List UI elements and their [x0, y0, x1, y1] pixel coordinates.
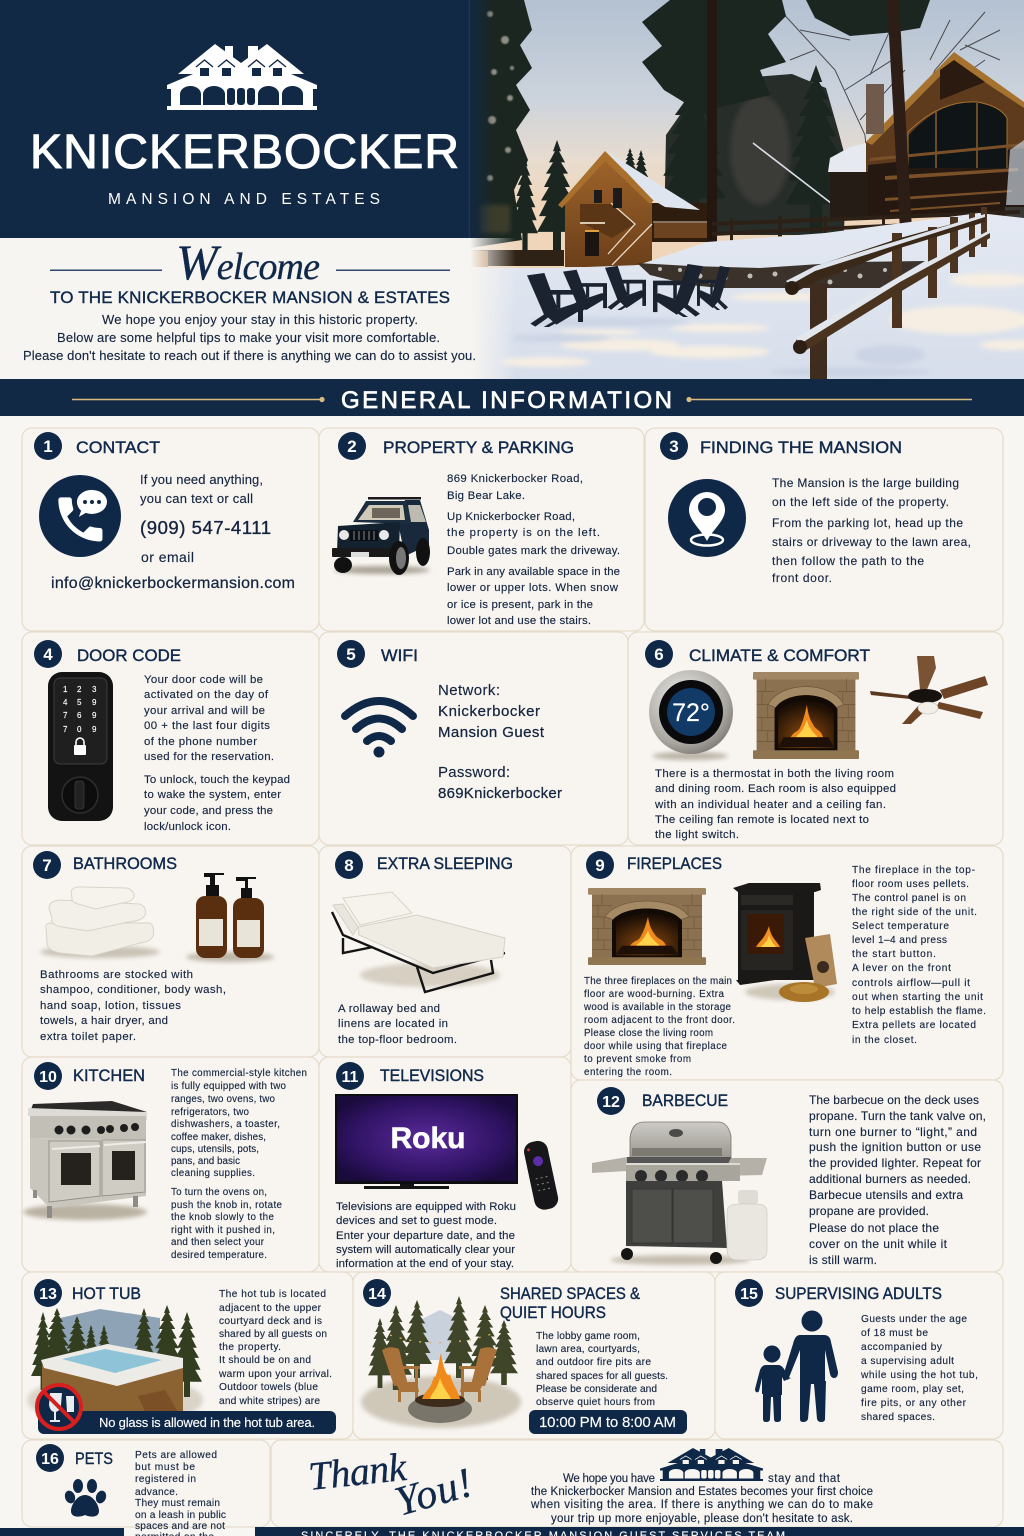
icon: remote: [522, 1139, 560, 1212]
fireplaces right text: to help establish the flame.: [852, 1006, 986, 1017]
icon: towels: [40, 887, 160, 958]
wifi details: [438, 682, 562, 802]
icon: rollaway bed: [332, 892, 505, 992]
finding text: then follow the path to the: [772, 554, 924, 568]
logo: mansion: [167, 44, 317, 110]
supervising text: Guests under the age: [861, 1314, 967, 1325]
icon: paw: [63, 1479, 108, 1517]
fireplaces right text: the right side of the unit.: [852, 907, 977, 918]
fireplaces left text: floor are wood-burning. Extra: [584, 989, 725, 1000]
wifi details: Network:: [438, 682, 500, 699]
shared spaces text: shared spaces for all guests.: [536, 1371, 668, 1382]
door code text: your code, and press the: [144, 805, 273, 817]
wifi details: Knickerbocker: [438, 703, 540, 720]
property text: the property is on the left.: [447, 527, 600, 539]
welcome text: [23, 312, 476, 363]
shared spaces text: Please be considerate and: [536, 1384, 657, 1395]
right foreground trunk: [887, 0, 912, 230]
icon: smart lock: 4: [63, 698, 68, 707]
adirondack chairs: [527, 264, 730, 327]
bathrooms text: towels, a hair dryer, and: [40, 1015, 168, 1027]
badge 3: [660, 432, 688, 460]
icon: smart lock: 7: [63, 725, 68, 734]
welcome text: Please don't hesitate to reach out if there is anything we can do to assist you.: [23, 348, 476, 363]
door code text: to wake the system, enter: [144, 789, 281, 801]
badge 12: [597, 1087, 625, 1115]
right cabin: [828, 52, 1024, 224]
bathrooms text: [40, 969, 226, 1043]
pets text: advance.: [135, 1487, 178, 1498]
fireplaces left text: The three fireplaces on the main: [584, 976, 732, 987]
icon: roku tv: Roku: [390, 1122, 466, 1155]
door code text: activated on the day of: [144, 689, 269, 701]
illustration: fire pit and chairs: [361, 1296, 521, 1428]
property text: 869 Knickerbocker Road,: [447, 473, 583, 485]
kitchen text: cups, utensils, pots,: [171, 1144, 259, 1155]
section heading: GENERAL INFORMATION: [341, 387, 672, 414]
badge 13: [34, 1279, 62, 1307]
fireplaces left text: [583, 976, 735, 1078]
panel 13: hot tub: [22, 1272, 353, 1439]
televisions text: Enter your departure date, and the: [336, 1230, 515, 1242]
supervising text: shared spaces.: [861, 1412, 935, 1423]
supervising text: game room, play set,: [861, 1384, 964, 1395]
badge 6: 6: [654, 645, 664, 664]
door code text: [144, 674, 290, 833]
contact text: info@knickerbockermansion.com: [51, 575, 295, 592]
hot tub text: adjacent to the upper: [219, 1303, 322, 1314]
wifi details: Password:: [438, 764, 510, 781]
icon: adult and child: [755, 1310, 838, 1422]
badge 9: [586, 851, 614, 879]
icon: map pin: [668, 479, 746, 557]
subtitle: MANSION AND ESTATES: [108, 191, 380, 208]
bed text: [338, 1003, 457, 1046]
icon: wifi: [345, 701, 413, 755]
welcome rule right: [336, 270, 450, 271]
icon: smart lock: 9: [92, 711, 97, 720]
door code text: Your door code will be: [144, 674, 263, 686]
hot tub text: courtyard deck and is: [219, 1316, 322, 1327]
badge 9: 9: [595, 856, 605, 875]
heading: shared spaces and quiet hours: [500, 1285, 640, 1322]
finding text: front door.: [772, 571, 832, 585]
icon: thermostat: [649, 670, 733, 760]
badge 12: 12: [602, 1094, 620, 1111]
icon: jeep: [332, 497, 430, 575]
supervising text: [860, 1314, 978, 1423]
bathrooms text: Bathrooms are stocked with: [40, 969, 193, 981]
property text: Double gates mark the driveway.: [447, 545, 620, 557]
title: KNICKERBOCKER: [30, 126, 459, 179]
fireplaces left text: to prevent smoke from: [584, 1054, 691, 1065]
fireplaces right text: Extra pellets are located: [852, 1020, 976, 1031]
script: thank you: [306, 1444, 478, 1526]
bathrooms text: hand soap, lotion, tissues: [40, 1000, 181, 1012]
footer bar left: [0, 1528, 124, 1536]
hero photo: snowy cabins: [470, 0, 1024, 379]
badge 6: [645, 640, 673, 668]
kitchen text: cleaning supplies.: [171, 1168, 255, 1179]
supervising text: while using the hot tub,: [860, 1370, 978, 1381]
panel: thank you: [271, 1440, 1003, 1527]
door code text: used for the reservation.: [144, 751, 274, 763]
panel 5: wifi: [319, 632, 628, 845]
hot tub text: Outdoor towels (blue: [219, 1382, 318, 1393]
section bar: general information: [0, 379, 1024, 416]
badge 13: 13: [39, 1286, 57, 1303]
kitchen text: dishwashers, a toaster,: [171, 1119, 280, 1130]
shared spaces text: lawn area, courtyards,: [536, 1344, 640, 1355]
heading: kitchen: KITCHEN: [73, 1067, 145, 1085]
fireplaces right text: level 1–4 and press: [852, 935, 947, 946]
bed text: the top-floor bedroom.: [338, 1034, 457, 1046]
fireplaces right text: out when starting the unit: [852, 992, 983, 1003]
property text: Big Bear Lake.: [447, 490, 525, 502]
thank you text: the Knickerbocker Mansion and Estates becomes your first choice: [531, 1486, 873, 1498]
fireplaces right text: A lever on the front: [852, 963, 951, 974]
panel 9: fireplaces: [571, 846, 1003, 1080]
fireplaces left text: wood is available in the storage: [583, 1002, 732, 1013]
welcome text: Below are some helpful tips to make your visit more comfortable.: [57, 330, 440, 345]
barbecue text: additional burners as needed.: [809, 1172, 971, 1186]
pets text: spaces and are not: [135, 1521, 225, 1532]
pets text: but must be: [135, 1462, 195, 1473]
panel 15: supervising adults: [715, 1272, 1003, 1439]
door code text: of the phone number: [144, 736, 257, 748]
icon: small mansion: [660, 1448, 763, 1481]
property text: [447, 473, 620, 627]
badge 5: [337, 640, 365, 668]
icon: ceiling fan: [870, 656, 988, 724]
panel 3: finding the mansion: [645, 428, 1003, 631]
badge 14: [363, 1279, 391, 1307]
ground snow: [470, 213, 1024, 379]
door code text: lock/unlock icon.: [144, 821, 231, 833]
badge 8: [335, 851, 363, 879]
icon: fireplace: [753, 672, 859, 759]
hot tub text: It should be on and: [219, 1355, 311, 1366]
icon: wood fireplace: [588, 888, 706, 965]
icon: smart lock: 2: [77, 685, 82, 694]
door code text: To unlock, touch the keypad: [144, 774, 290, 786]
panel 7: bathrooms: [22, 846, 319, 1057]
retaining wall: [637, 261, 925, 288]
fireplaces left text: room adjacent to the front door.: [584, 1015, 735, 1026]
barbecue text: propane. Turn the tank valve on,: [809, 1109, 986, 1123]
heading: extra sleeping: EXTRA SLEEPING: [377, 855, 513, 873]
barbecue text: The barbecue on the deck uses: [809, 1093, 979, 1107]
badge 16: [36, 1444, 64, 1472]
contact text: If you need anything,: [140, 472, 263, 487]
barbecue text: the provided lighter. Repeat for: [809, 1156, 981, 1170]
back fence: [712, 210, 1020, 246]
heading: bathrooms: BATHROOMS: [73, 855, 177, 873]
fireplaces right text: controls airflow—pull it: [852, 978, 970, 989]
wifi details: Mansion Guest: [438, 724, 545, 741]
heading: barbecue: BARBECUE: [642, 1092, 728, 1110]
televisions text: information at the end of your stay.: [336, 1258, 514, 1270]
heading: finding the mansion: FINDING THE MANSION: [700, 439, 902, 457]
callout: no glass: [38, 1411, 336, 1434]
welcome panel: [0, 234, 516, 379]
barbecue text: [809, 1093, 986, 1267]
left cabin: [470, 151, 707, 267]
kitchen text: ranges, two ovens, two: [171, 1094, 276, 1105]
central trunk: [707, 0, 717, 245]
script: thank you: You!: [390, 1460, 478, 1526]
supervising text: a supervising adult: [861, 1356, 954, 1367]
pets text: Pets are allowed: [135, 1450, 217, 1461]
kitchen text: To turn the ovens on,: [171, 1187, 267, 1198]
badge 7: 7: [42, 856, 52, 875]
icon: phone with speech bubble: [39, 475, 121, 557]
hot tub text: the property.: [219, 1342, 281, 1353]
panel 14: shared spaces and quiet hours: [353, 1272, 715, 1439]
hot tub text: warm upon your arrival.: [218, 1369, 332, 1380]
supervising text: of 18 must be: [861, 1328, 928, 1339]
finding text: The Mansion is the large building: [772, 476, 959, 490]
kitchen text: right with it pushed in,: [171, 1225, 275, 1236]
welcome text: We hope you enjoy your stay in this historic property.: [102, 312, 418, 327]
icon: smart lock: 5: [77, 698, 82, 707]
hot tub text: [218, 1289, 332, 1407]
climate text: the light switch.: [655, 829, 739, 841]
thank you text: when visiting the area. If there is anything we can do to make: [530, 1499, 873, 1511]
door code text: 00 + the last four digits: [144, 720, 270, 732]
badge 1: 1: [43, 437, 53, 456]
pets text: registered in: [135, 1474, 196, 1485]
televisions text: Televisions are equipped with Roku: [336, 1201, 516, 1213]
bed text: linens are located in: [338, 1018, 448, 1030]
kitchen text: pans, and basic: [171, 1156, 240, 1167]
supervising text: accompanied by: [861, 1342, 943, 1353]
kitchen text: is fully equipped with two: [171, 1081, 287, 1092]
script: thank you: Thank: [306, 1444, 410, 1499]
bare trees: [780, 8, 1000, 215]
badge 11: 11: [342, 1069, 359, 1086]
welcome subheading: TO THE KNICKERBOCKER MANSION & ESTATES: [50, 288, 450, 307]
televisions text: [336, 1201, 516, 1270]
footer bar right: [255, 1527, 1024, 1536]
fireplaces right text: The fireplace in the top-: [852, 865, 975, 876]
barbecue text: is still warm.: [809, 1253, 877, 1267]
heading: pets: PETS: [75, 1450, 113, 1468]
thank you text: We hope you have: [563, 1473, 655, 1485]
icon: smart lock: 3: [92, 685, 97, 694]
panel 12: barbecue: [571, 1080, 1003, 1272]
kitchen text: and then select your: [171, 1237, 265, 1248]
kitchen text: refrigerators, two: [171, 1107, 250, 1118]
finding text: [772, 476, 971, 585]
gold dot right: [686, 397, 692, 402]
badge 10: 10: [39, 1069, 57, 1086]
callout: quiet hours: 10:00 PM to 8:00 AM: [539, 1414, 676, 1431]
fireplaces right text: Select temperature: [852, 921, 949, 932]
gold rule right: [689, 398, 972, 400]
fireplaces right text: floor room uses pellets.: [852, 879, 969, 890]
icon: smart lock: 1: [63, 685, 68, 694]
supervising text: fire pits, or any other: [861, 1398, 967, 1409]
pets text: on a leash in public: [135, 1510, 226, 1521]
badge 8: 8: [344, 856, 354, 875]
heading: supervising adults: SUPERVISING ADULTS: [775, 1285, 942, 1303]
icon: smart lock: 6: [77, 711, 82, 720]
kitchen text: push the knob in, rotate: [171, 1200, 283, 1211]
badge 4: [34, 640, 62, 668]
climate text: The ceiling fan remote is located next to: [655, 814, 869, 826]
finding text: stairs or driveway to the lawn area,: [772, 535, 971, 549]
welcome rule left: [50, 270, 162, 271]
fireplaces left text: entering the room.: [584, 1067, 672, 1078]
kitchen text: [171, 1068, 307, 1261]
pets text: [135, 1450, 226, 1536]
barbecue text: Please do not place the: [809, 1221, 939, 1235]
heading: shared spaces and quiet hours: SHARED SPACES &: [500, 1285, 640, 1303]
fireplaces left text: Please close the living room: [584, 1028, 713, 1039]
badge 5: 5: [346, 645, 356, 664]
climate text: with an individual heater and a ceiling fan.: [654, 799, 886, 811]
icon: no glass sign: [37, 1385, 81, 1429]
heading: door code: DOOR CODE: [77, 647, 181, 665]
heading: fireplaces: FIREPLACES: [627, 855, 722, 873]
fireplaces right text: the start button.: [852, 949, 936, 960]
panel 6: climate and comfort: [628, 632, 1003, 845]
contact text: (909) 547-4111: [140, 517, 271, 538]
shared spaces text: and outdoor fire pits are: [536, 1357, 651, 1368]
property text: lower lot and use the stairs.: [447, 615, 591, 627]
finding text: on the left side of the property.: [772, 495, 949, 509]
fireplaces right text: in the closet.: [852, 1035, 917, 1046]
icon: smart lock: 7: [63, 711, 68, 720]
thank you text: [530, 1473, 873, 1525]
panel 11: televisions: [319, 1057, 571, 1272]
climate text: [654, 768, 896, 841]
hot tub text: shared by all guests on: [219, 1329, 327, 1340]
badge 2: [338, 432, 366, 460]
contact text: [51, 472, 295, 592]
badge 15: 15: [740, 1286, 758, 1303]
illustration: hot tub with pines: [27, 1305, 203, 1425]
icon: pellet stove with bag: [733, 883, 837, 1002]
shared spaces text: observe quiet hours from: [536, 1397, 655, 1408]
panel 10: kitchen: [22, 1057, 319, 1272]
callout: no glass: No glass is allowed in the hot tub area.: [99, 1415, 315, 1430]
property text: or ice is present, park in the: [447, 599, 593, 611]
heading: shared spaces and quiet hours: QUIET HOURS: [500, 1304, 606, 1322]
heading: hot tub: HOT TUB: [72, 1285, 141, 1303]
contact text: or email: [141, 549, 194, 565]
panel 1: contact: [22, 428, 319, 631]
badge 2: 2: [347, 437, 357, 456]
pets text: They must remain: [135, 1498, 220, 1509]
badge 3: 3: [669, 437, 679, 456]
kitchen text: The commercial-style kitchen: [171, 1068, 307, 1079]
fireplaces right text: The control panel is on: [852, 893, 966, 904]
heading: climate and comfort: CLIMATE & COMFORT: [689, 647, 870, 665]
kitchen text: desired temperature.: [171, 1250, 267, 1261]
panel 16: pets: [22, 1440, 270, 1536]
welcome script heading: Welcome: [176, 234, 320, 290]
barbecue text: cover on the unit while it: [809, 1237, 948, 1251]
heading: property and parking: PROPERTY & PARKING: [383, 439, 574, 457]
shared spaces text: The lobby game room,: [536, 1331, 640, 1342]
icon: range: [23, 1101, 147, 1220]
icon: smart lock: [48, 672, 113, 821]
shared spaces text: [536, 1331, 668, 1408]
property text: lower or upper lots. When snow: [447, 582, 619, 594]
door code text: your arrival and will be: [144, 705, 265, 717]
badge 4: 4: [43, 645, 53, 664]
televisions text: system will automatically clear your: [336, 1244, 515, 1256]
property text: Park in any available space in the: [447, 566, 620, 578]
header navy panel: [0, 0, 494, 238]
heading: televisions: TELEVISIONS: [380, 1067, 484, 1085]
icon: thermostat: 72°: [672, 699, 710, 727]
kitchen text: the knob slowly to the: [171, 1212, 275, 1223]
panel 2: property and parking: [319, 428, 644, 631]
badge 16: 16: [41, 1451, 59, 1468]
kitchen text: coffee maker, dishes,: [171, 1132, 266, 1143]
televisions text: devices and set to guest mode.: [336, 1215, 497, 1227]
thank you text: stay and that: [768, 1473, 841, 1485]
icon: smart lock: 9: [92, 698, 97, 707]
badge 15: [735, 1279, 763, 1307]
heading: contact: CONTACT: [76, 439, 160, 457]
heading: wifi: WIFI: [381, 647, 418, 665]
property text: Up Knickerbocker Road,: [447, 511, 575, 523]
panel 8: extra sleeping: [319, 846, 571, 1057]
badge 1: [34, 432, 62, 460]
hot tub text: and white stripes) are: [219, 1396, 320, 1407]
barbecue text: Barbecue utensils and extra: [809, 1188, 963, 1202]
badge 14: 14: [368, 1286, 386, 1303]
bed text: A rollaway bed and: [338, 1003, 440, 1015]
barbecue text: push the ignition button or use: [809, 1140, 981, 1154]
bathrooms text: shampoo, conditioner, body wash,: [40, 984, 226, 996]
finding text: From the parking lot, head up the: [772, 516, 963, 530]
bathrooms text: extra toilet paper.: [40, 1031, 136, 1043]
climate text: and dining room. Each room is also equipped: [655, 783, 896, 795]
icon: roku tv: [335, 1094, 518, 1189]
gold rule left: [72, 398, 322, 400]
icon: smart lock: 9: [92, 725, 97, 734]
fireplaces left text: door while using that fireplace: [584, 1041, 728, 1052]
gold dot left: [319, 397, 325, 402]
badge 10: [34, 1062, 62, 1090]
icon: smart lock: 0: [77, 725, 82, 734]
barbecue text: propane are provided.: [809, 1204, 929, 1218]
climate text: There is a thermostat in both the living room: [655, 768, 894, 780]
badge 7: [33, 851, 61, 879]
contact text: you can text or call: [140, 491, 253, 506]
badge 11: [336, 1062, 364, 1090]
barbecue text: turn one burner to “light,” and: [809, 1125, 977, 1139]
icon: gas grill: [592, 1122, 767, 1265]
foreground rail fence: [785, 207, 990, 379]
thank you text: your trip up more enjoyable, please don't hesitate to ask.: [551, 1513, 853, 1525]
icon: amber pump bottles: [186, 873, 274, 962]
fireplaces right text: [852, 865, 986, 1046]
wifi details: 869Knickerbocker: [438, 785, 562, 802]
callout: quiet hours: [529, 1410, 687, 1434]
hot tub text: The hot tub is located: [219, 1289, 326, 1300]
panel 4: door code: [22, 632, 319, 845]
